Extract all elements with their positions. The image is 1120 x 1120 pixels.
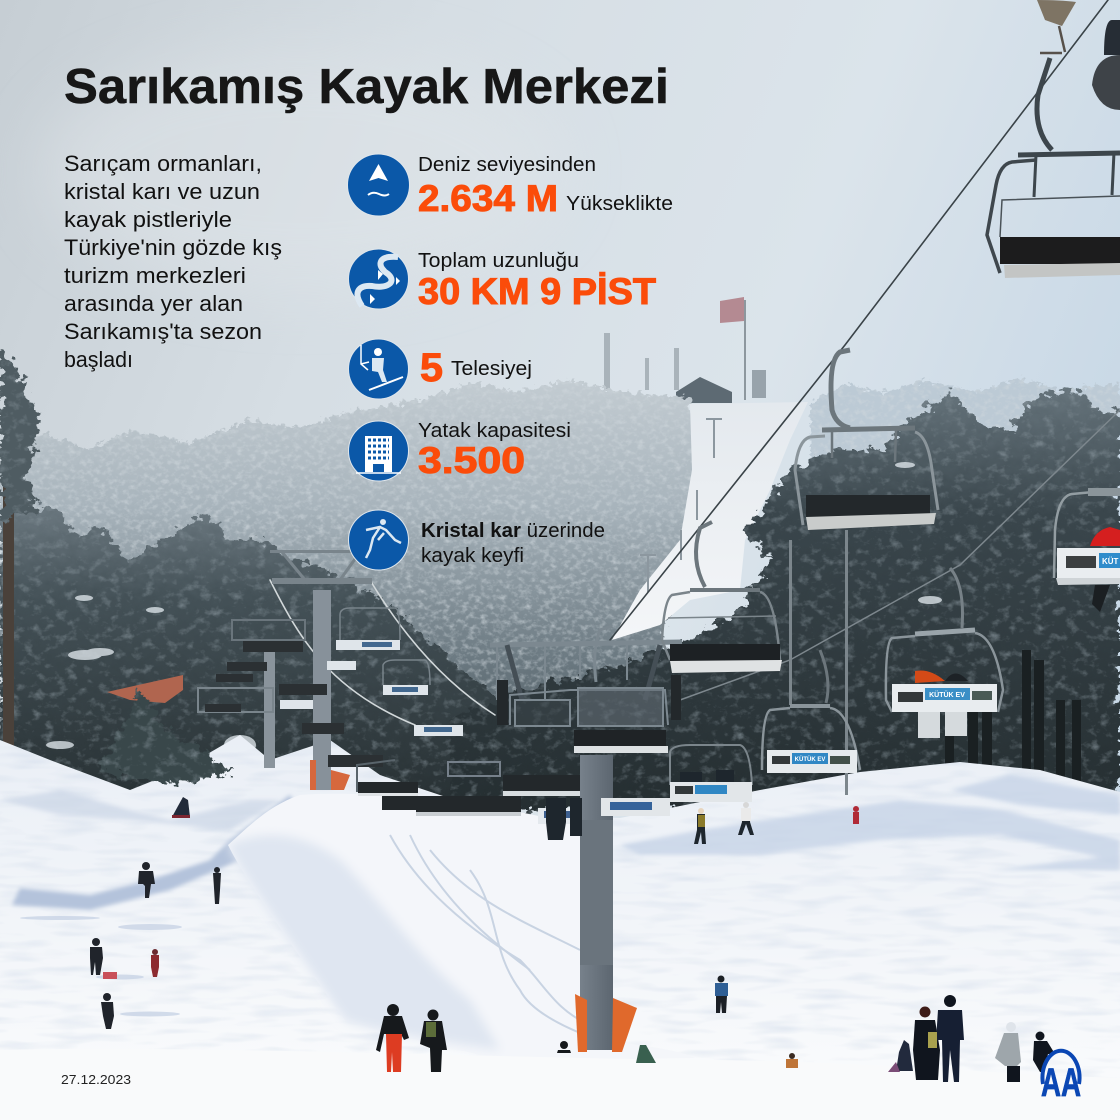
people: skiers below lift bbox=[546, 798, 859, 844]
icon: skier bbox=[348, 510, 408, 570]
background: young firs in front of left mound bbox=[100, 690, 235, 785]
text block: crystal snow caption: Kristal kar üzerinde bbox=[421, 520, 605, 542]
chairlift: near dark chairs behind pylon bbox=[357, 760, 585, 824]
stat: bed capacity bbox=[418, 420, 571, 481]
chairlift: rider at top right bbox=[1092, 20, 1120, 110]
people: walkers on left run bbox=[90, 862, 221, 1029]
stat: run length: Toplam uzunluğu bbox=[418, 250, 579, 272]
chairlift: advert chair lower right bbox=[762, 650, 860, 773]
background: dark fir forest on the left bbox=[0, 490, 500, 800]
background: central snow hump bbox=[228, 794, 695, 1060]
background: orange roof behind trees bbox=[107, 675, 183, 703]
background: ski tracks on hump bbox=[390, 835, 590, 1035]
chairlift: pylon head structure bbox=[490, 626, 682, 726]
stat: run length: 30 KM 9 PİST bbox=[418, 271, 656, 312]
background: snow-covered ground bbox=[0, 735, 1120, 1120]
stat: altitude: 2.634 M bbox=[418, 178, 558, 219]
chairlift: main pylon bbox=[575, 755, 637, 1052]
icon: chairlift rider bbox=[348, 339, 408, 399]
logo: Anadolu Agency bbox=[1041, 1051, 1081, 1105]
people: sledder by left mound bbox=[172, 797, 190, 818]
stat: altitude bbox=[418, 154, 673, 219]
text block: intro paragraph: Türkiye'nin gözde kış bbox=[64, 235, 282, 260]
background: snow shadows left mound bbox=[0, 790, 280, 830]
chairlift: far tower centre bbox=[270, 550, 372, 790]
background: snowy summit ski run bbox=[612, 402, 808, 640]
text block: crystal snow caption bbox=[421, 520, 605, 567]
chairlift: far advert chairs bbox=[280, 608, 463, 736]
stat: altitude: Deniz seviyesinden bbox=[418, 154, 596, 176]
chairlift: chair top right bbox=[987, 0, 1120, 278]
people: foreground group right bbox=[888, 995, 1055, 1082]
stat: bed capacity: Yatak kapasitesi bbox=[418, 420, 571, 442]
logo: Anadolu Agency: AA bbox=[1041, 1061, 1081, 1105]
chairlift: advert chair with riders, centre right: KÜTÜK EV bbox=[929, 690, 965, 699]
text block: intro paragraph: arasında yer alan bbox=[64, 291, 243, 316]
chairlift: advert chair with riders, centre right bbox=[886, 568, 1003, 738]
chairlift: advert chair lower right: KÜTÜK EV bbox=[795, 756, 825, 763]
chairlift: far dark chairs bbox=[205, 641, 383, 767]
text block: intro paragraph: kayak pistleriyle bbox=[64, 207, 232, 232]
chairlift: advert chair in front of skiers bbox=[601, 745, 752, 816]
people: foreground group left bbox=[376, 1004, 656, 1072]
icon: winding ski run bbox=[348, 249, 408, 309]
people: skier mid slope bbox=[715, 976, 798, 1068]
background: flag and summit masts bbox=[604, 297, 766, 403]
date: 27.12.2023 bbox=[61, 1073, 131, 1087]
background: trunks on the right bbox=[945, 650, 1081, 800]
chairlift: haul cables bbox=[270, 0, 1120, 725]
stat: run length bbox=[418, 250, 656, 312]
text block: crystal snow caption: kayak keyfi bbox=[421, 545, 524, 567]
stat: altitude: Yükseklikte bbox=[566, 193, 673, 215]
chairlift: thin pole below chair bbox=[789, 530, 848, 795]
background: dark fir forest on the right bbox=[450, 388, 1120, 810]
chairlift: advert chair at right edge with rider bbox=[1054, 488, 1120, 612]
text block: intro paragraph: kristal karı ve uzun bbox=[64, 179, 260, 204]
chairlift: dark seat on pylon bbox=[574, 730, 668, 753]
text block: intro paragraph bbox=[64, 151, 282, 372]
background: shaded ridge of central hump bbox=[12, 795, 300, 910]
background: lower foreground snow bbox=[0, 1049, 1120, 1120]
text block: intro paragraph: turizm merkezleri bbox=[64, 263, 246, 288]
text block: intro paragraph: başladı bbox=[64, 347, 133, 372]
chairlift: far tower left bbox=[198, 620, 305, 768]
stat: bed capacity: 3.500 bbox=[418, 440, 525, 481]
background: pale cloud glow bbox=[40, 50, 560, 290]
stat: lifts bbox=[420, 346, 532, 390]
chairlift: chair over run bbox=[662, 522, 782, 673]
background: shaded flank of hump bbox=[228, 835, 500, 1050]
background: tower line on ski run bbox=[640, 418, 722, 592]
chairlift: advert chair at right edge with rider: KÜT bbox=[1102, 557, 1119, 566]
background: frosted far trees on the right bbox=[810, 378, 1120, 470]
text block: intro paragraph: Sarıkamış'ta sezon bbox=[64, 319, 262, 344]
title: Sarıkamış Kayak Merkezi bbox=[64, 60, 669, 114]
background: small shadows on left run bbox=[20, 916, 182, 1016]
text block: intro paragraph: Sarıçam ormanları, bbox=[64, 151, 262, 176]
icon: hotel building bbox=[348, 421, 408, 481]
stat: lifts: Telesiyej bbox=[451, 358, 532, 380]
background: left tree trunk bbox=[0, 350, 40, 778]
icon: altitude peak bbox=[348, 154, 410, 216]
background: hazy far forest bbox=[0, 380, 700, 800]
background: snow clumps on trees bbox=[46, 462, 942, 755]
stat: lifts: 5 bbox=[420, 346, 443, 390]
chairlift: large chair right of run bbox=[795, 350, 938, 530]
background: blue shadows on right slope bbox=[620, 775, 1120, 870]
